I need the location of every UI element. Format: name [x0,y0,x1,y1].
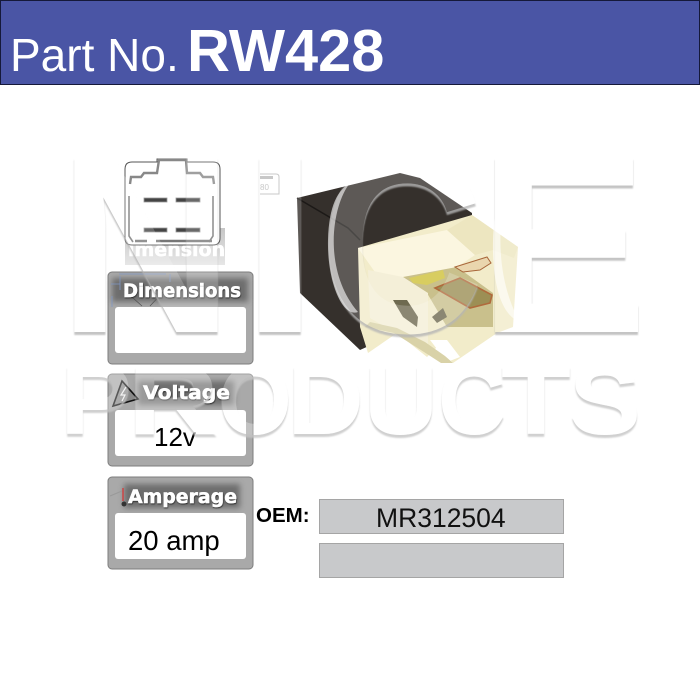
OEM number box [320,500,564,534]
ghost label behind connector: imension [128,239,225,261]
watermark: PRODUCTS: D [287,345,364,455]
dimensions heading: Dimensions [123,280,241,302]
watermark: PRODUCTS: S [569,345,641,455]
panel: amperage [108,477,253,569]
watermark: PRODUCTS: P [60,345,132,455]
relay clip notch [430,340,460,362]
watermark: PRODUCTS: T [501,345,571,455]
relay cream housing [358,215,518,363]
icon: connector pin diagram [125,159,220,245]
ghost label behind connector [125,228,225,265]
icon: dimension sketch [111,274,170,307]
relay left wall [368,270,428,354]
OEM label: OEM: [256,504,310,527]
relay right wing [447,215,518,258]
watermark: PRODUCTS [60,345,641,455]
amperage value: 20 amp [128,525,220,556]
part number title: RW428 [187,17,384,84]
ghost small label: 80 [260,183,269,192]
watermark: PRODUCTS: C [438,345,506,455]
voltage value box [115,410,246,456]
panel: dimensions [108,272,253,364]
icon: high voltage triangle [113,381,138,406]
watermark: PRODUCTS: U [364,345,438,455]
header bar [0,0,700,84]
amperage value box [115,513,246,559]
part number title: Part No. [10,29,179,81]
empty OEM box [320,544,564,578]
watermark: PRODUCTS: R [127,345,219,455]
watermark: NICE: C [320,102,484,386]
voltage value: 12v [154,422,196,452]
OEM number box: MR312504 [376,503,506,533]
dimensions value box [115,307,246,353]
watermark: NICE [58,102,648,386]
relay cavity [403,267,493,327]
relay body ridge [297,198,360,240]
ghost small label [260,174,279,194]
voltage heading: Voltage [143,382,230,404]
panel: voltage [108,374,253,466]
photo: relay [297,173,518,363]
watermark: NICE: I [240,102,320,386]
watermark: NICE: E [478,102,648,386]
relay top plate [358,230,475,277]
watermark: PRODUCTS: O [218,345,292,455]
relay blades [455,257,491,272]
amperage heading: Amperage [128,486,237,508]
watermark: NICE: N [58,102,234,386]
pin slots [144,198,200,232]
icon: amperage warning [110,488,126,506]
watermark: crescent highlights [328,166,520,322]
relay dark body [297,173,472,350]
